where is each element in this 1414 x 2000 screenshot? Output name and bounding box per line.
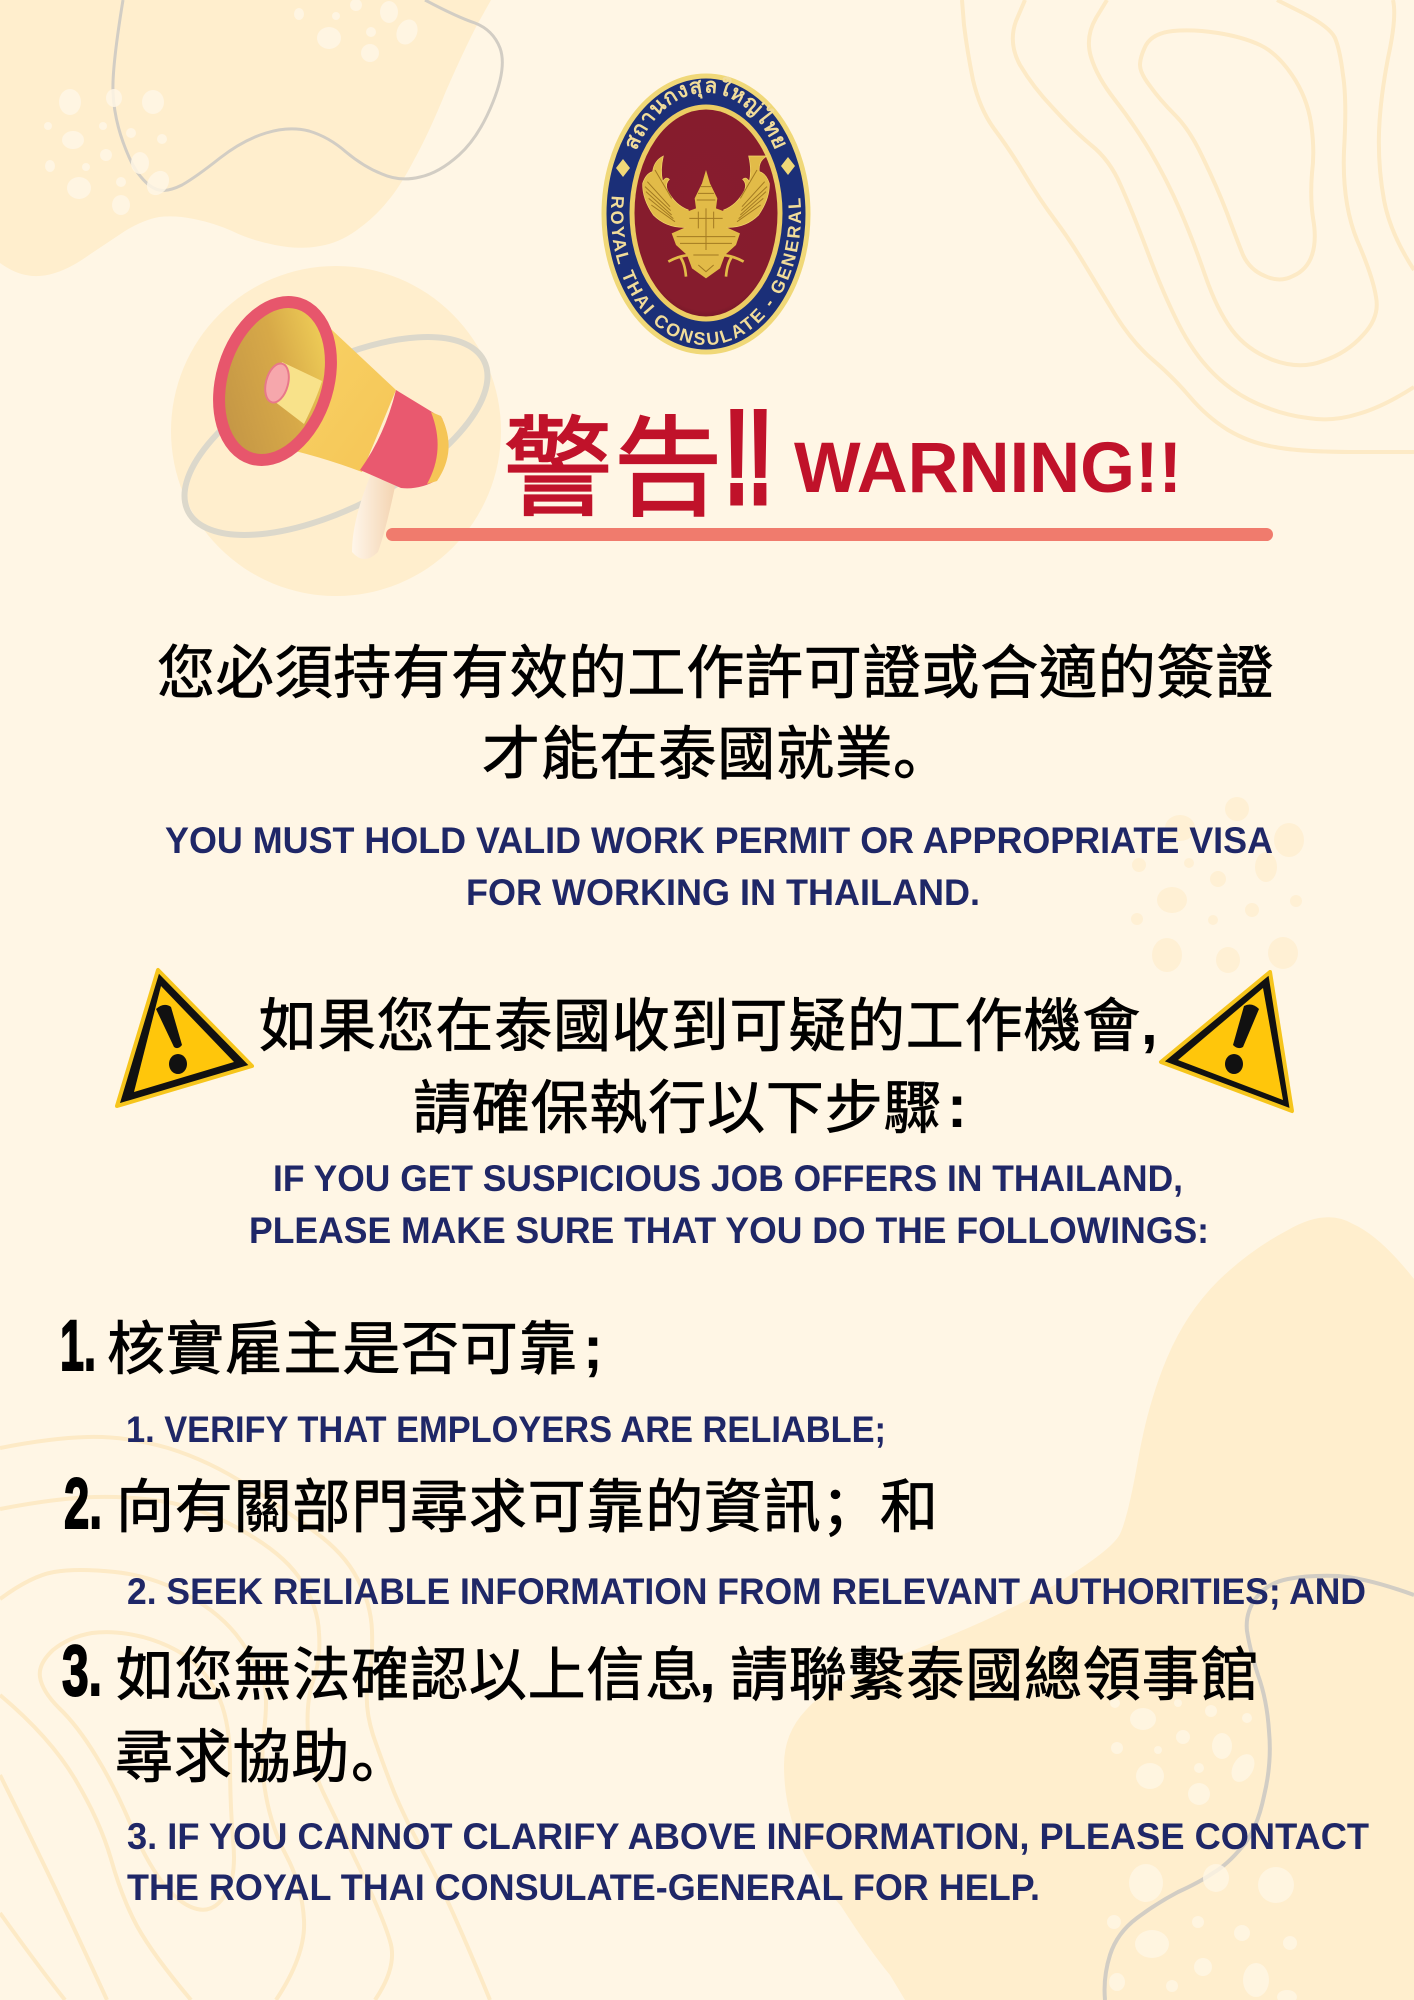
megaphone backdrop circle bbox=[171, 266, 501, 596]
text block: suspicious offers (English): PLEASE MAKE SURE THAT YOU DO THE FOLLOWINGS: bbox=[249, 1209, 1209, 1251]
background: top-right contour lines bbox=[962, 0, 1414, 452]
text block: requirement (English) bbox=[165, 819, 1273, 913]
background: bottom-left contour lines bbox=[0, 1437, 490, 2000]
seal: English text: ROYAL THAI CONSULATE - GENERAL bbox=[610, 196, 802, 345]
background: top-left grey squiggle bbox=[113, 0, 502, 190]
step 2: 向有關部門尋求可靠的資訊 bbox=[116, 1475, 822, 1540]
title underline bbox=[386, 528, 1273, 541]
icon: right warning triangle bbox=[1161, 972, 1292, 1111]
step 2: 2. SEEK RELIABLE INFORMATION FROM RELEVANT AUTHORITIES; AND bbox=[127, 1570, 1366, 1612]
title: Chinese warning: 警告 bbox=[504, 408, 724, 529]
text block: suspicious offers (Chinese) bbox=[259, 990, 1158, 1141]
step 2 bbox=[64, 1465, 1366, 1612]
consulate seal logo bbox=[602, 74, 810, 354]
icon: left warning triangle bbox=[117, 970, 252, 1106]
step 3: THE ROYAL THAI CONSULATE-GENERAL FOR HELP. bbox=[127, 1866, 1040, 1908]
step 1 bbox=[60, 1307, 886, 1450]
seal: Thai text: สถานกงสุลใหญ่ไทย bbox=[626, 76, 786, 150]
text block: suspicious offers (Chinese): : bbox=[947, 1073, 967, 1140]
step 3: 3. bbox=[62, 1632, 102, 1711]
icon: megaphone bbox=[201, 288, 449, 559]
text block: requirement (Chinese): 。 bbox=[893, 722, 951, 787]
text block: requirement (English): FOR WORKING IN THAILAND. bbox=[466, 871, 980, 913]
megaphone mouth bbox=[201, 288, 349, 474]
text block: requirement (English): YOU MUST HOLD VALID WORK PERMIT OR APPROPRIATE VISA bbox=[165, 819, 1273, 861]
step 3: , bbox=[699, 1639, 716, 1706]
background: mid-right dots bbox=[1131, 797, 1304, 973]
step 2: ； bbox=[821, 1475, 879, 1540]
background: top-left blob bbox=[0, 0, 491, 276]
step 3: 如您無法確認以上信息 bbox=[116, 1643, 704, 1708]
megaphone rear section bbox=[360, 390, 448, 488]
step 3: 3. IF YOU CANNOT CLARIFY ABOVE INFORMATION, PLEASE CONTACT bbox=[127, 1815, 1369, 1857]
step 3 bbox=[62, 1632, 1369, 1908]
text block: suspicious offers (Chinese): 如果您在泰國收到可疑的工作機會 bbox=[259, 994, 1141, 1059]
megaphone driver cylinder bbox=[270, 362, 322, 424]
megaphone stripe bbox=[427, 412, 449, 484]
megaphone driver cap bbox=[261, 361, 293, 405]
step 1: 1. bbox=[60, 1307, 96, 1386]
step 1: 1. VERIFY THAT EMPLOYERS ARE RELIABLE; bbox=[126, 1408, 886, 1450]
background: bottom-right dots bbox=[1107, 1698, 1297, 2000]
orbit ring behind megaphone bbox=[155, 296, 517, 576]
step 2: 2. bbox=[64, 1465, 102, 1544]
text block: suspicious offers (Chinese): , bbox=[1141, 990, 1158, 1057]
text block: suspicious offers (Chinese): 請確保執行以下步驟 bbox=[413, 1076, 942, 1141]
background: bottom-right grey squiggle bbox=[1105, 1576, 1414, 2000]
step 3: 。 bbox=[351, 1725, 409, 1790]
seal: diamonds bbox=[616, 157, 795, 177]
text block: suspicious offers (English): IF YOU GET SUSPICIOUS JOB OFFERS IN THAILAND, bbox=[273, 1157, 1183, 1199]
step 3: 請聯繫泰國總領事館 bbox=[730, 1643, 1259, 1708]
text block: requirement (Chinese) bbox=[157, 641, 1274, 787]
text block: suspicious offers (English) bbox=[249, 1157, 1209, 1251]
background: bottom-right blob bbox=[784, 1217, 1414, 2000]
step 1: 核實雇主是否可靠 bbox=[107, 1317, 577, 1382]
megaphone handle bbox=[352, 474, 396, 559]
background: top-left dots bbox=[44, 0, 422, 215]
title: English warning: WARNING!! bbox=[794, 429, 1182, 508]
step 2: 和 bbox=[880, 1475, 939, 1540]
title: exclamation marks: !! bbox=[725, 384, 772, 532]
step 1: ; bbox=[583, 1314, 603, 1381]
text block: requirement (Chinese): 您必須持有有效的工作許可證或合適的簽證 bbox=[157, 641, 1274, 706]
step 3: 尋求協助 bbox=[115, 1725, 350, 1790]
megaphone cone bbox=[270, 300, 396, 472]
seal: garuda emblem bbox=[643, 156, 769, 278]
text block: requirement (Chinese): 才能在泰國就業 bbox=[482, 722, 894, 787]
